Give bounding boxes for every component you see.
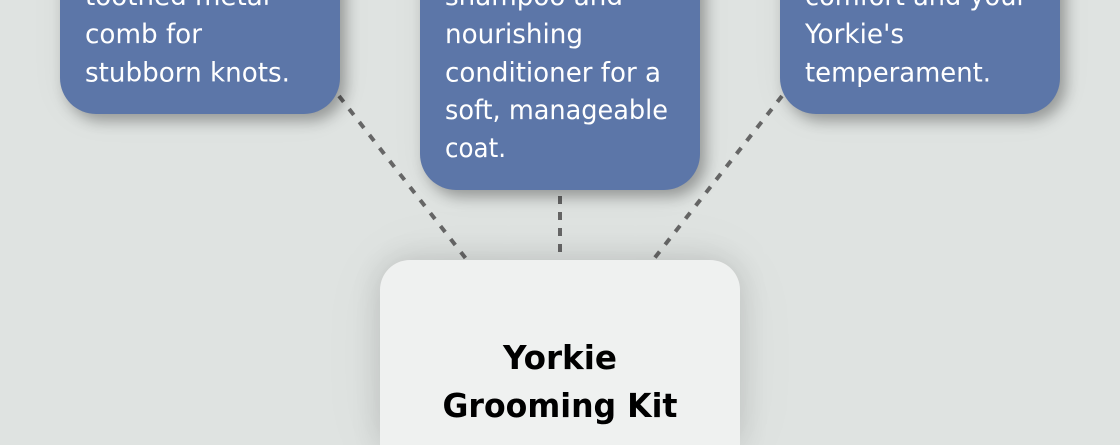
card text: shampoo: coat. [445,133,506,164]
card text: comb: stubborn knots. [85,58,290,88]
card text: shampoo: nourishing [445,19,583,50]
panel: shampoo card [420,0,700,190]
title: Grooming Kit [442,386,678,425]
card text: comb [85,0,290,88]
card text: shampoo [445,0,668,164]
title: Yorkie [502,338,617,377]
card text: comfort: Yorkie's [804,19,904,50]
card text: comb: comb for [85,19,203,50]
connector: middle card to kit [558,196,562,260]
panel: central kit card [380,260,740,445]
card text: shampoo: soft, manageable [445,95,668,126]
card text: comfort [804,0,1028,88]
connector: right card to kit [653,96,782,260]
card text: shampoo: conditioner for a [445,58,661,88]
card text: comfort: temperament. [805,58,991,88]
connector: left card to kit [339,96,467,260]
panel: comfort card [780,0,1060,114]
panel: comb card [60,0,340,114]
title [442,338,678,425]
